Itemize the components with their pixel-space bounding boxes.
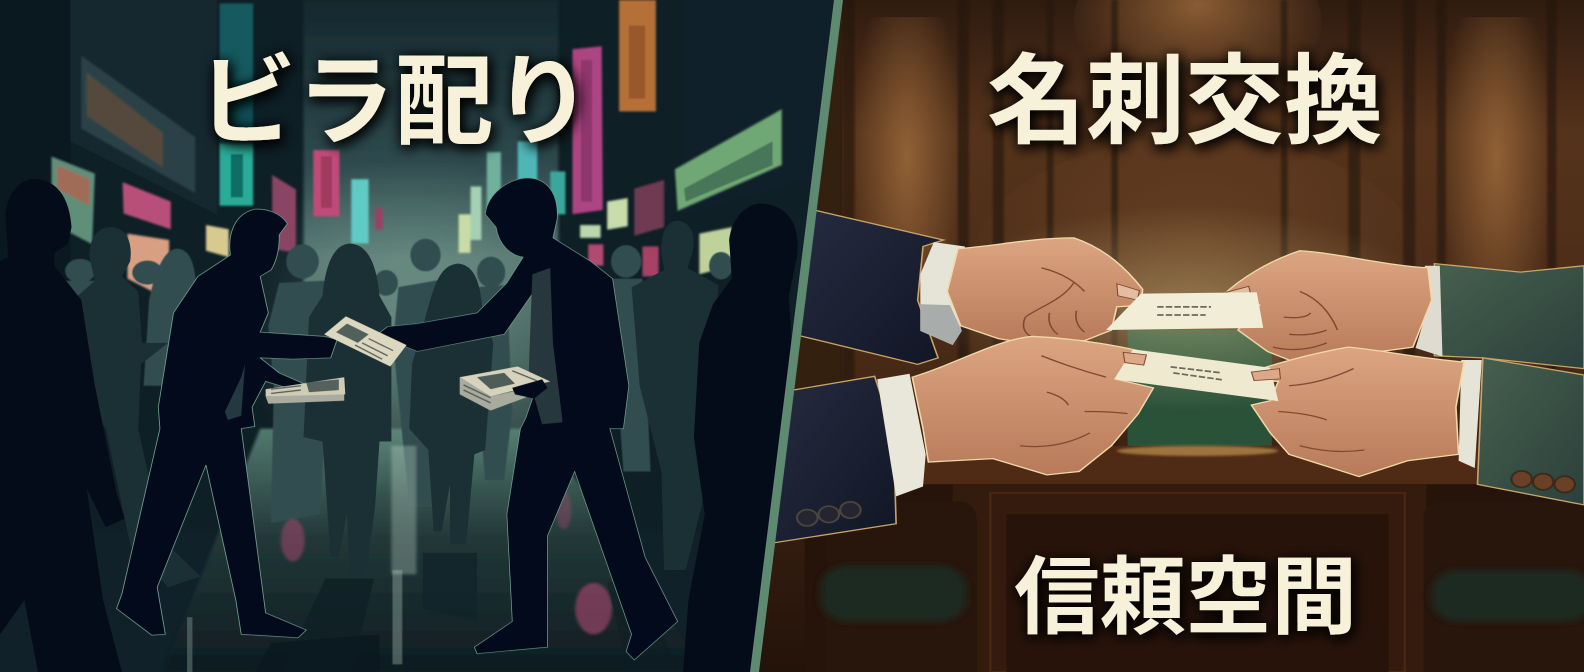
flyer stack, right man	[460, 366, 550, 411]
far foreground walkers	[0, 179, 798, 672]
divider	[750, 0, 843, 672]
wood wall	[740, 0, 1584, 672]
lower right sleeve	[1459, 358, 1584, 505]
heading: business card exchange: 名刺交換	[987, 46, 1383, 156]
upper left hand	[947, 238, 1143, 343]
lower business card	[1114, 349, 1280, 401]
golden glow behind hands	[968, 219, 1376, 400]
heading: flyer distribution: ビラ配り	[198, 46, 592, 157]
upper left sleeve	[794, 209, 965, 364]
upper right hand	[1223, 251, 1432, 364]
street background	[0, 0, 867, 672]
flyer being handed over	[324, 316, 407, 366]
chairs	[821, 501, 1584, 672]
green back panel and desk	[805, 330, 1584, 672]
panel: flyer handing on a rainy neon street	[0, 0, 867, 672]
sign lettering	[231, 26, 772, 208]
upper right sleeve	[1416, 264, 1584, 369]
flyer stack, left man	[266, 377, 345, 404]
upper business card	[1106, 292, 1263, 330]
neon signs	[51, 0, 782, 300]
background crowd	[64, 239, 733, 523]
wet floor reflections	[187, 444, 616, 672]
man handing out a flyer, left	[117, 209, 337, 638]
man handing out a flyer, right	[373, 178, 678, 660]
mid crowd	[73, 221, 718, 587]
lower left sleeve	[770, 374, 926, 543]
lower left hand	[912, 336, 1153, 475]
heading: trust space: 信頼空間	[1014, 551, 1357, 646]
panel: business card exchange in a wood-panelled room	[740, 0, 1584, 672]
lower right hand	[1249, 347, 1464, 477]
